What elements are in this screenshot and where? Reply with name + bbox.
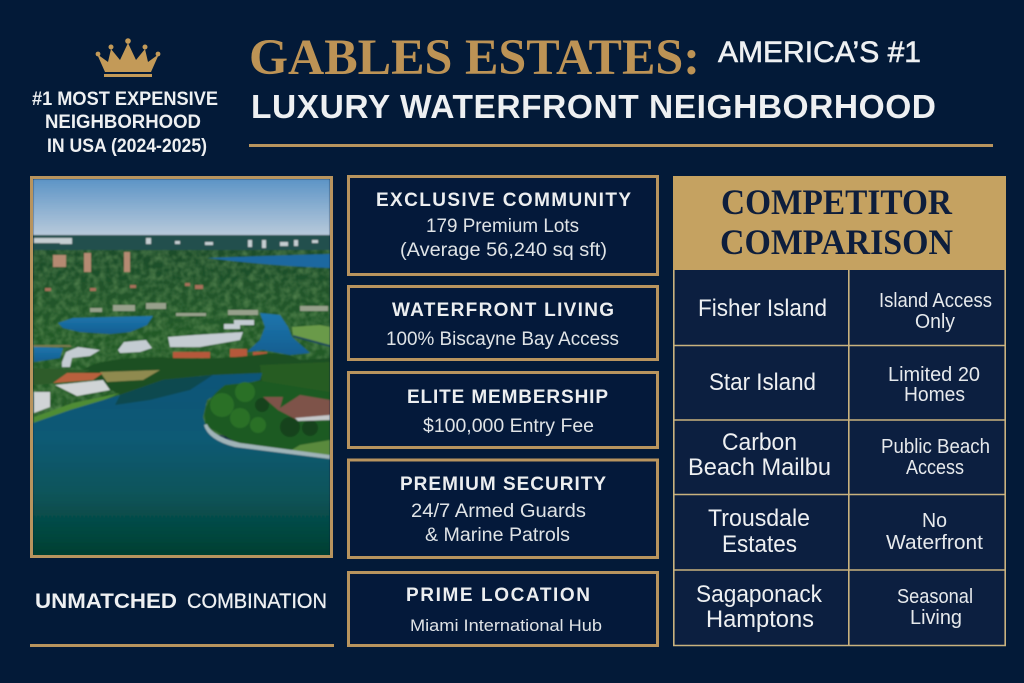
row: star island: Star Island [709, 369, 816, 396]
panel: prime location [348, 572, 658, 646]
badge text: NEIGHBORHOOD [45, 112, 201, 133]
badge text [32, 89, 218, 157]
row: carbon beach: Public Beach [881, 436, 990, 458]
row: fisher island: Island Access [879, 290, 992, 312]
main water [33, 373, 330, 556]
distant skyline [34, 238, 318, 248]
header badge [32, 38, 218, 157]
panel: exclusive community: 179 Premium Lots [426, 216, 579, 237]
row: fisher island: Fisher Island [698, 295, 827, 322]
panel: premium security: & Marine Patrols [425, 525, 570, 546]
title: america's number one: AMERICA’S #1 [718, 36, 921, 69]
panel: premium security [348, 460, 658, 558]
panel: premium security: 24/7 Armed Guards [411, 501, 586, 522]
caption: unmatched combination: COMBINATION [187, 589, 327, 613]
row: sagaponack hamptons: Sagaponack [696, 581, 823, 608]
row: star island: Limited 20 [888, 364, 980, 386]
table heading: COMPETITOR [721, 182, 953, 222]
panel: prime location: Miami International Hub [410, 616, 602, 635]
panel: premium security: PREMIUM SECURITY [400, 474, 606, 495]
panel: waterfront living [348, 286, 658, 360]
mid buildings [62, 320, 254, 367]
row: trousdale estates: Waterfront [886, 532, 983, 554]
row: sagaponack hamptons: Hamptons [706, 606, 814, 633]
peninsula [205, 381, 330, 457]
row: trousdale estates: No [922, 510, 947, 532]
table heading [673, 176, 1006, 270]
panel: exclusive community [348, 176, 658, 274]
caption: unmatched combination: UNMATCHED [35, 589, 177, 613]
mid tree band [80, 353, 330, 395]
row: fisher island [698, 290, 992, 333]
row: trousdale estates: Estates [722, 531, 797, 558]
caption: unmatched combination [35, 589, 327, 613]
panel: exclusive community: (Average 56,240 sq sft) [400, 240, 607, 261]
row: carbon beach [688, 429, 990, 481]
row: star island: Homes [904, 384, 965, 406]
row: carbon beach: Access [906, 457, 964, 479]
panel: elite membership: $100,000 Entry Fee [423, 416, 594, 437]
row: trousdale estates: Trousdale [708, 505, 810, 532]
panel: elite membership: ELITE MEMBERSHIP [407, 387, 608, 408]
row: trousdale estates [708, 505, 983, 558]
panel: aerial photo [32, 178, 332, 556]
badge text: #1 MOST EXPENSIVE [32, 89, 218, 110]
row: carbon beach: Carbon [722, 429, 797, 456]
table heading: COMPARISON [720, 222, 953, 262]
panel: exclusive community: EXCLUSIVE COMMUNITY [376, 190, 631, 211]
panel: prime location: PRIME LOCATION [406, 585, 590, 606]
icon: crown [96, 38, 160, 77]
panel: competitor comparison table [673, 176, 1006, 646]
panel: waterfront living: WATERFRONT LIVING [392, 300, 614, 321]
panel: elite membership [348, 372, 658, 448]
title: second line: LUXURY WATERFRONT NEIGHBORHOOD [251, 89, 936, 126]
shoreline houses upper [90, 303, 328, 316]
row: sagaponack hamptons: Seasonal [897, 586, 973, 608]
row: fisher island: Only [915, 311, 955, 333]
row: carbon beach: Beach Mailbu [688, 454, 831, 481]
badge text: IN USA (2024-2025) [47, 136, 207, 157]
row: sagaponack hamptons: Living [910, 607, 962, 629]
panel: waterfront living: 100% Biscayne Bay Access [386, 329, 619, 350]
row: sagaponack hamptons [696, 581, 973, 633]
title [249, 30, 936, 126]
title: gold serif: GABLES ESTATES: [249, 30, 700, 86]
row: star island [709, 364, 980, 406]
